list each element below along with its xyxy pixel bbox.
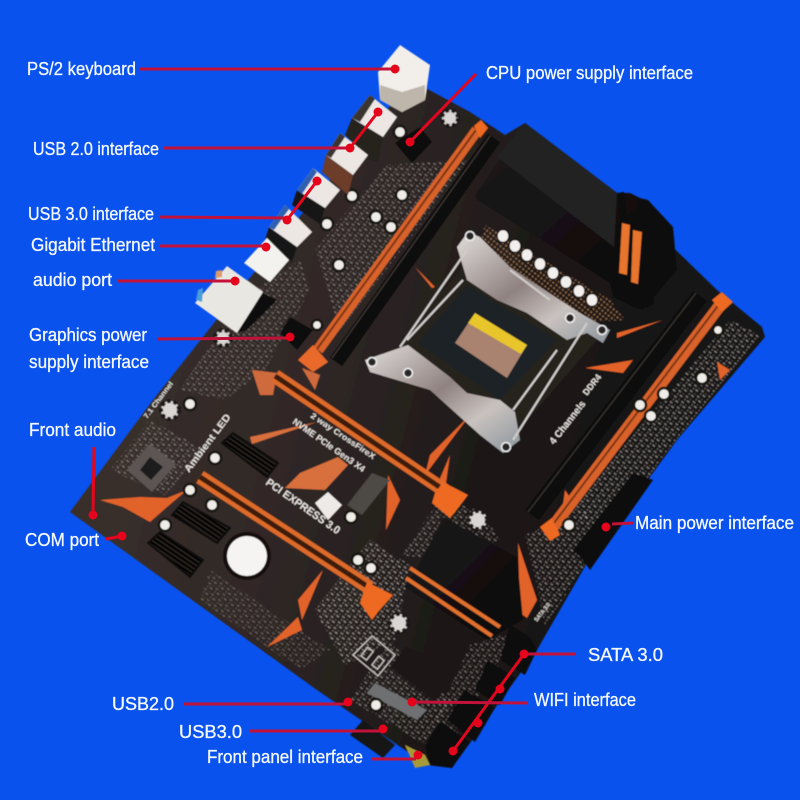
audio chip [127,444,176,492]
QR code [315,492,342,520]
PCI Express x16 slot top [275,376,468,518]
callout: USB 2.0 interface [33,108,382,159]
warning sticker [455,313,527,378]
motherboard [70,45,765,768]
callout: Front audio: Front audio [29,420,116,440]
CMOS battery [223,532,271,580]
callout: COM port: COM port [25,530,99,550]
callout: CPU power supply interface [406,63,693,146]
main power connector [573,473,653,570]
callout: USB2.0 [112,694,352,714]
callout: audio port [33,270,240,290]
text: NVME: NVME PCIe Gen3 X4 [291,416,367,474]
callout: SATA 3.0: SATA 3.0 [588,645,663,665]
board printing [143,372,603,623]
audio jacks [195,266,277,333]
USB 2.0 ports [322,95,397,195]
callout: Front panel interface: Front panel interface [207,747,363,767]
socket surround [395,262,597,440]
VRM heatsink [475,123,677,310]
text: Ambient LED: Ambient LED [183,412,234,475]
callout: CPU power supply interface: CPU power supply interface [486,63,693,83]
callout: Gigabit Ethernet [31,235,270,255]
PS/2 port [378,45,430,112]
graphics power connector [280,317,313,350]
component texture [110,160,760,745]
callout: audio port: audio port [33,270,112,290]
USB 3.0 ports [265,168,340,262]
callout: WIFI interface [408,690,636,710]
bottom retention plate [365,345,520,453]
callout: USB2.0: USB2.0 [112,694,174,714]
callout: SATA 3.0 [448,645,663,756]
Ethernet port [244,238,289,282]
CPU power connector [395,127,432,163]
callout: USB 3.0 interface: USB 3.0 interface [28,204,154,224]
M.2 slot [347,473,390,515]
PCIe x4 slots [148,433,278,577]
circuit board [70,85,765,768]
text: CrossFireX: 2 way CrossFireX [309,411,378,462]
orange board graphics [100,267,730,647]
callout: Gigabit Ethernet: Gigabit Ethernet [31,235,155,255]
SATA connectors [425,625,537,768]
WIFI slot [367,683,427,720]
callout: PS/2 keyboard: PS/2 keyboard [27,59,136,79]
text: PCI EXPRESS: PCI EXPRESS 3.0 [263,477,342,537]
callout: Front audio [29,420,116,520]
callout: USB3.0: USB3.0 [179,722,242,742]
callout: PS/2 keyboard [27,59,400,79]
text: DDR4: DDR4 [581,372,603,397]
callout: WIFI interface: WIFI interface [534,690,636,710]
text: 7.1 Channel: 7.1 Channel [143,381,175,420]
chipset heatsink [405,517,523,640]
right DIMM slots [528,292,733,541]
contact dots [480,225,625,322]
front panel header [405,745,430,768]
socket body [418,285,557,400]
CPU socket [365,232,610,453]
text: 4 Channels: 4 Channels [548,399,589,447]
USB header [350,720,395,758]
callout: Graphics power supply interface [29,325,294,372]
callout: USB3.0 [179,722,388,742]
M.2 cover [390,647,460,702]
mounting holes [368,232,606,452]
PCI Express x16 slot bottom [200,477,393,620]
callout: Main power interface: Main power interface [635,513,794,533]
capacitors [159,126,723,711]
screw mounts [161,110,487,632]
callout: USB 2.0 interface: USB 2.0 interface [33,139,159,159]
text: SATA 3.0: SATA 3.0 [534,602,552,623]
top retention plate [457,232,610,343]
VRM chokes [497,230,598,306]
callout: Graphics power supply interface: supply interface [29,352,149,372]
retention wires [400,250,587,440]
callout: Graphics power supply interface: Graphics power [29,325,147,345]
left DIMM slots [298,120,494,372]
callout: USB 3.0 interface [28,176,322,224]
debug display [353,636,395,676]
